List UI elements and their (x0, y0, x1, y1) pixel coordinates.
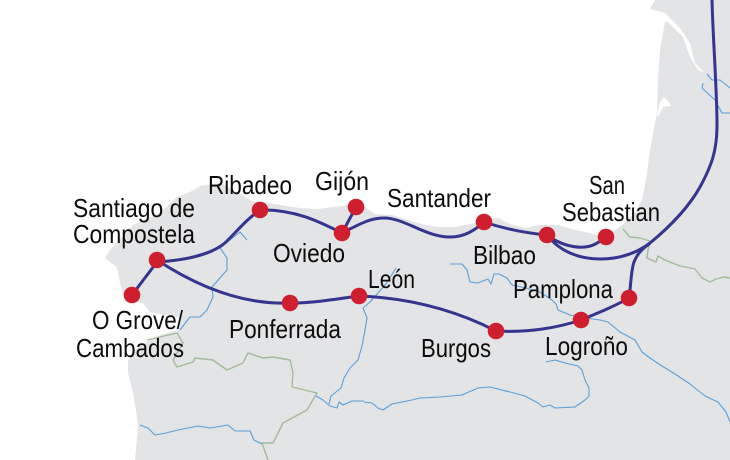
label: Santiago de Compostela: Santiago de (73, 193, 195, 223)
label: Ribadeo: Ribadeo (208, 170, 292, 200)
rivers (140, 74, 730, 444)
label: San Sebastian: Sebastian (562, 197, 660, 227)
label: O Grove/Cambados: Cambados (76, 333, 184, 363)
label: San Sebastian: San (589, 170, 625, 200)
label: Oviedo: Oviedo (273, 238, 345, 268)
label: Logroño: Logroño (545, 331, 628, 361)
label: Gijón: Gijón (315, 166, 369, 196)
label: Santiago de Compostela (73, 193, 195, 249)
label: San Sebastian (562, 170, 660, 227)
borders (147, 229, 730, 460)
Arcachon basin (657, 97, 670, 117)
label: O Grove/Cambados: O Grove/ (92, 305, 184, 335)
label: Santiago de Compostela: Compostela (73, 219, 195, 249)
label: O Grove/Cambados (76, 305, 184, 363)
route lines (132, 0, 717, 331)
label: Pamplona: Pamplona (513, 274, 613, 304)
label: Burgos: Burgos (421, 333, 491, 363)
label: León: León (368, 264, 415, 294)
label: Ponferrada: Ponferrada (229, 314, 341, 344)
label: Bilbao: Bilbao (473, 240, 536, 270)
stop markers (124, 199, 637, 339)
label: Santander: Santander (387, 183, 491, 213)
